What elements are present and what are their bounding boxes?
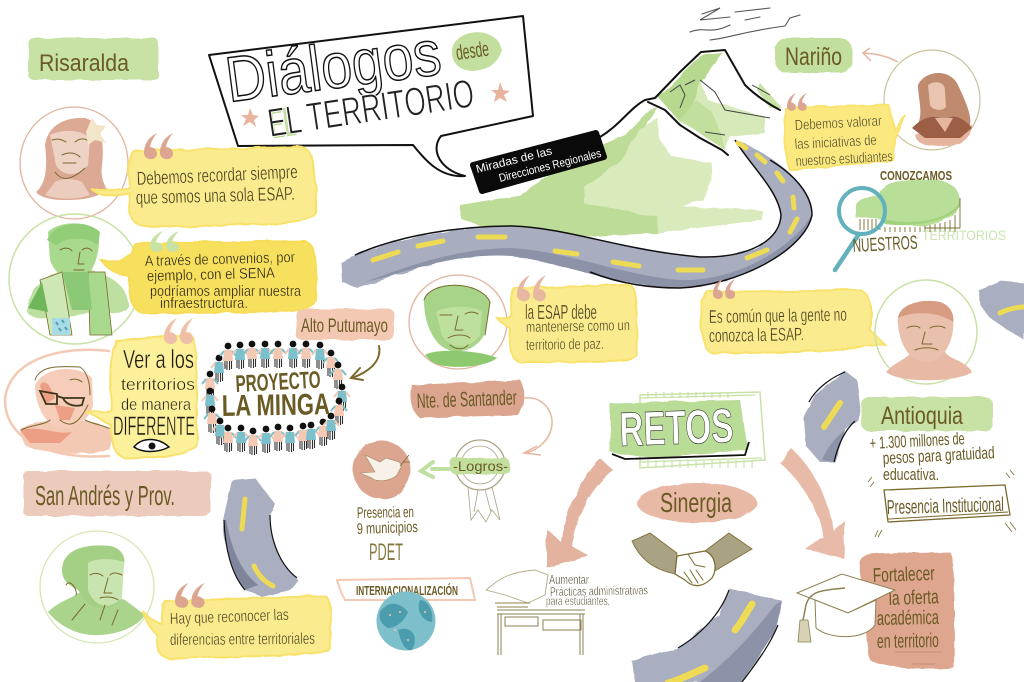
- quote bubble: Ver a los territorios: DIFERENTE: [113, 411, 195, 441]
- panel: Fortalecer la oferta académica: la oferta: [888, 586, 940, 610]
- tag: San Andrés y Prov.: San Andrés y Prov.: [35, 480, 175, 511]
- quote bubble: San Andrés: [142, 583, 331, 658]
- ring of people: Proyecto La Minga: PROYECTO: [235, 367, 321, 398]
- star left: [241, 108, 259, 127]
- panel: Fortalecer la oferta académica: en territorio: [877, 630, 939, 653]
- tag: Sinergia: [637, 483, 757, 523]
- tag: Sinergia: Sinergia: [660, 487, 732, 518]
- title speech bubble: [209, 16, 533, 176]
- tag: Nariño: [775, 38, 898, 73]
- icon: rosette Logros: [450, 440, 510, 522]
- text: Antioquia note: educativa.: [883, 465, 939, 484]
- icon: eye: [134, 440, 169, 452]
- road segment: near Antioquia: [803, 371, 860, 462]
- text: aumentar prácticas: Prácticas administrativas: [550, 583, 648, 599]
- quote bubble: Risaralda: [90, 133, 316, 227]
- portrait: San Andrés speaker: [40, 531, 154, 643]
- icon: graduation cap: [797, 574, 895, 642]
- road segment: right edge: [978, 281, 1024, 340]
- heading: RETOS: [610, 392, 765, 468]
- quote bubble: Risaralda: Debemos recordar siempre: [136, 162, 298, 190]
- tag: Risaralda: [28, 38, 159, 80]
- tag: Alto Putumayo with arrow: [296, 309, 394, 380]
- icon: dove on peach blob: [353, 441, 411, 499]
- quote bubble: ESAP territorio de paz: la ESAP debe: [525, 302, 597, 324]
- tag: Antioquia: [861, 397, 993, 431]
- tag: Antioquia: Antioquia: [881, 402, 963, 430]
- icon: rosette Logros: -Logros-: [453, 458, 508, 474]
- quote bubble: Ver a los territorios: [85, 318, 197, 458]
- portrait: Nariño speaker: [884, 50, 980, 150]
- portrait: Risaralda speaker: [20, 107, 128, 219]
- quote bubble: ESAP territorio de paz: territorio de paz.: [526, 336, 604, 354]
- arrow: logros to dove: [421, 462, 478, 477]
- banner: Internacionalización: [337, 578, 475, 600]
- banner: Internacionalización: INTERNACIONALIZACIÓN: [356, 583, 458, 598]
- quote bubble: convenios SENA: infraestructura.: [160, 295, 248, 312]
- portrait: diferente speaker: [5, 350, 112, 457]
- quote bubble: Risaralda: que somos una sola ESAP.: [136, 184, 295, 209]
- tag: Risaralda: Risaralda: [39, 50, 130, 77]
- quote bubble: Ver a los territorios: territorios: [121, 375, 195, 394]
- quote bubble: San Andrés: Hay que reconocer las: [170, 607, 289, 628]
- title: desde badge: desde: [454, 38, 490, 65]
- text: aumentar prácticas: para estudiantes.: [546, 596, 610, 608]
- quote bubble: San Andrés: diferencias entre territoriales: [170, 631, 315, 649]
- text: aumentar prácticas: [546, 572, 648, 608]
- quote bubble: Ver a los territorios: Ver a los: [123, 344, 194, 374]
- icon: globe: [376, 592, 436, 650]
- quote bubble: convenios SENA: A través de convenios, por: [145, 249, 295, 270]
- title: El Territorio: EL: [267, 100, 298, 147]
- quote bubble: Nariño: nuestros estudiantes: [795, 149, 893, 170]
- text: Presencia en 9 municipios PDET: 9 municipios: [357, 519, 418, 538]
- arrow: right to oferta académica: [780, 449, 845, 559]
- panel: Fortalecer la oferta académica: académica: [877, 607, 940, 630]
- quote bubble: ESAP territorio de paz: [497, 275, 637, 362]
- panel: Fortalecer la oferta académica: [859, 552, 955, 669]
- quote bubble: convenios SENA: ejemplo, con el SENA: [147, 265, 275, 285]
- label: Miradas de las Direcciones Regionales: [473, 133, 604, 191]
- quote bubble: convenios SENA: podríamos ampliar nuestra: [150, 283, 302, 300]
- text: Antioquia note: + 1.300 millones de: [869, 429, 965, 453]
- quote bubble: Ver a los territorios: de manera: [121, 395, 191, 414]
- quote bubble: Es común: Es común que la gente no: [709, 304, 847, 327]
- title: El Territorio: [265, 72, 477, 147]
- title: desde badge: [452, 32, 502, 71]
- text: Presencia en 9 municipios PDET: PDET: [369, 539, 403, 566]
- arrow: left to practices: [547, 458, 614, 568]
- icon: magnifier over territory, Conozcamos Nuestros Territorios: TERRITORIOS: [922, 227, 1006, 243]
- icon: magnifier over territory, Conozcamos Nuestros Territorios: CONOZCAMOS: [880, 169, 952, 183]
- mountain illustration: [460, 8, 800, 236]
- star right: [491, 82, 510, 102]
- portrait: Es común speaker: [875, 280, 977, 384]
- quote bubble: Nariño: Debemos valorar: [794, 113, 882, 134]
- portrait: ESAP speaker: [409, 275, 507, 369]
- icon: magnifier over territory, Conozcamos Nuestros Territorios: NUESTROS: [852, 233, 918, 257]
- tag: Nte. de Santander with arrow: [411, 380, 552, 455]
- box: Presencia Institucional: [868, 470, 1016, 537]
- road segment: lower left: [223, 478, 298, 597]
- tag: Alto Putumayo with arrow: Alto Putumayo: [301, 316, 388, 337]
- road segment: bottom: [632, 588, 782, 682]
- text: Presencia en 9 municipios PDET: [357, 504, 418, 566]
- text: Antioquia note: [869, 429, 995, 484]
- quote bubble: Es común: conozca la ESAP.: [709, 323, 804, 346]
- title: El Territorio: EL TERRITORIO: [265, 72, 477, 146]
- quote bubble: Nariño: [785, 93, 905, 170]
- tag: Nariño: Nariño: [785, 43, 842, 71]
- tag: San Andrés y Prov.: [23, 471, 211, 516]
- heading: RETOS: RETOS: [619, 400, 734, 457]
- label: Miradas de las Direcciones Regionales: Miradas de las: [475, 145, 554, 176]
- smoke: [690, 8, 800, 40]
- portrait: second Risaralda speaker: [9, 214, 141, 344]
- label: Miradas de las Direcciones Regionales: Direcciones Regionales: [498, 148, 603, 185]
- ring of people: Proyecto La Minga: [202, 341, 350, 455]
- quote bubble: ESAP territorio de paz: mantenerse como un: [526, 317, 630, 336]
- icon: desk with papers: [486, 570, 585, 655]
- ring of people: Proyecto La Minga: LA MINGA: [222, 388, 330, 423]
- text: Presencia en 9 municipios PDET: Presencia en: [357, 504, 414, 522]
- title: Diálogos: Diálogos: [221, 16, 445, 116]
- quote bubble: convenios SENA: [102, 231, 316, 313]
- quote bubble: Es común: [701, 279, 885, 353]
- tag: Nte. de Santander with arrow: Nte. de Santander: [416, 387, 517, 413]
- panel: Fortalecer la oferta académica: Fortalecer: [872, 563, 935, 587]
- icon: handshake: [632, 533, 752, 586]
- quote bubble: Nariño: las iniciativas de: [794, 133, 877, 153]
- icon: magnifier over territory, Conozcamos Nuestros Territorios: [835, 169, 1006, 270]
- text: aumentar prácticas: Aumentar: [549, 572, 589, 587]
- road: main curve: [341, 140, 812, 288]
